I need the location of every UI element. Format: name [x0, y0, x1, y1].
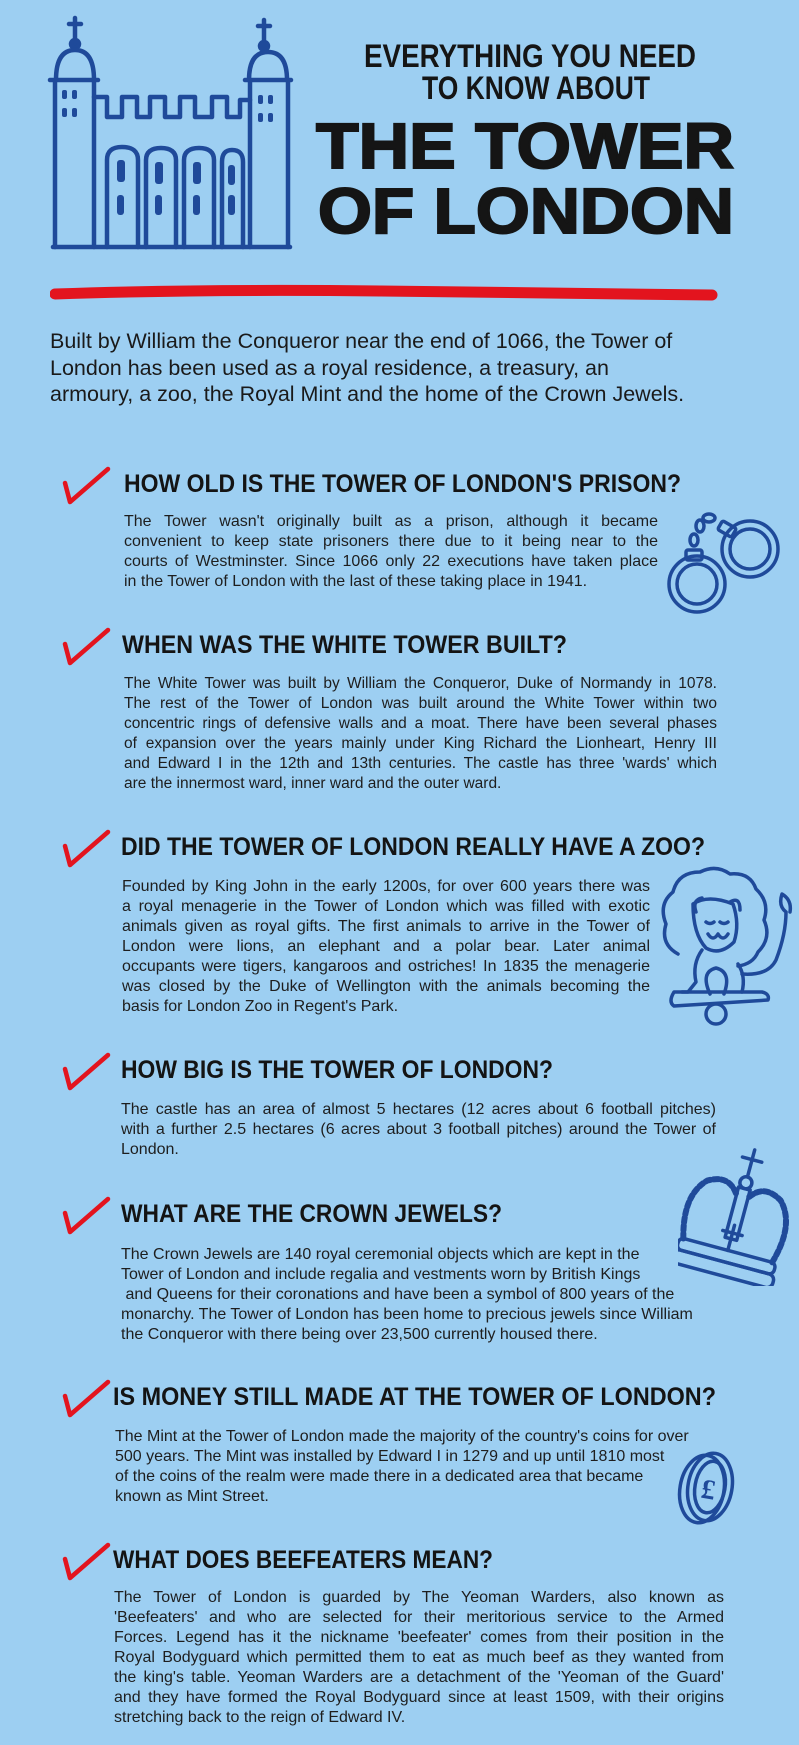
text: crown jewels: the Conqueror with there being over 23,500 currently housed there. [121, 1326, 598, 1343]
text: zoo: Founded by King John in the early 1200s, for over 600 years there was [122, 878, 650, 895]
intro text: Built by William the Conqueror near the end of 1066, the Tower of [50, 329, 672, 353]
title: OF LONDON [318, 175, 734, 245]
text: white tower: are the innermost ward, inner ward and the outer ward. [124, 775, 501, 792]
icon: tower of london drawing [48, 16, 294, 250]
text: crown jewels: and Queens for their coronations and have been a symbol of 800 years of the [125, 1286, 674, 1303]
text: white tower: The White Tower was built by William the Conqueror, Duke of Normandy in 1078. [124, 675, 717, 692]
text: mint: The Mint at the Tower of London made the majority of the country's coins for over [115, 1428, 689, 1445]
icon: crown [678, 1148, 789, 1286]
text: white tower: and Edward I in the 12th and 13th centuries. The castle has three 'wards' which [124, 755, 717, 772]
text: zoo: was closed by the Duke of Wellington with the animals becoming the [122, 978, 650, 995]
text: prison: The Tower wasn't originally built as a prison, although it became [124, 513, 658, 530]
text: size: The castle has an area of almost 5 hectares (12 acres about 6 football pitches) [121, 1101, 716, 1118]
text: mint: known as Mint Street. [115, 1488, 269, 1505]
text: beefeaters [114, 1589, 724, 1726]
text: zoo [122, 878, 650, 1015]
text: crown jewels: Tower of London and include regalia and vestments worn by British Kings [121, 1266, 640, 1283]
checkmarks and headings: DID THE TOWER OF LONDON REALLY HAVE A ZOO? [121, 833, 705, 861]
intro text: armoury, a zoo, the Royal Mint and the home of the Crown Jewels. [50, 382, 684, 406]
icon: pound coin [678, 1452, 734, 1524]
text: crown jewels: monarchy. The Tower of London has been home to precious jewels since William [121, 1306, 693, 1323]
checkmarks and headings: HOW BIG IS THE TOWER OF LONDON? [121, 1056, 553, 1084]
text: size: with a further 2.5 hectares (6 acres about 3 football pitches) around the Tower of [121, 1121, 716, 1138]
title: EVERYTHING YOU NEED [364, 38, 696, 74]
text: beefeaters: and they have formed the Royal Bodyguard since at least 1509, with their origins [114, 1689, 724, 1706]
icon: pound coin: £ [699, 1474, 718, 1507]
checkmarks and headings: HOW OLD IS THE TOWER OF LONDON'S PRISON? [124, 470, 681, 498]
text: zoo: basis for London Zoo in Regent's Park. [122, 998, 398, 1015]
text: beefeaters: Forces. Legend has it the nickname 'beefeater' comes from their position in the [114, 1629, 724, 1646]
title: THE TOWER [316, 110, 734, 182]
text: mint: 500 years. The Mint was installed by Edward I in 1279 and up until 1810 most [115, 1448, 664, 1465]
text: size: London. [121, 1141, 179, 1158]
intro text [50, 329, 684, 406]
red underline stroke [50, 284, 718, 300]
text: zoo: a royal menagerie in the Tower of London which was filled with exotic [122, 898, 650, 915]
icon: lion [661, 866, 792, 1026]
text: size [121, 1101, 716, 1158]
icon: handcuffs [667, 512, 780, 614]
text: white tower: concentric rings of defensive walls and a moat. There have been several phases [124, 715, 717, 732]
text: zoo: London were lions, an elephant and a polar bear. Later animal [122, 938, 650, 955]
text: beefeaters: The Tower of London is guarded by The Yeoman Warders, also known as [114, 1589, 724, 1606]
text: prison: in the Tower of London with the last of these taking place in 1941. [124, 573, 587, 590]
text: beefeaters: the king's table. Yeoman Warders are a detachment of the 'Yeoman of the Guard' [114, 1669, 724, 1686]
checkmarks and headings: WHAT DOES BEEFEATERS MEAN? [113, 1546, 493, 1574]
text: white tower [124, 675, 717, 792]
checkmarks and headings: IS MONEY STILL MADE AT THE TOWER OF LONDON? [113, 1383, 716, 1411]
text: beefeaters: Royal Bodyguard which permitted them to eat as much beef as they wanted from [114, 1649, 724, 1666]
text: mint: of the coins of the realm were made there in a dedicated area that became [115, 1468, 643, 1485]
text: beefeaters: stretching back to the reign of Edward IV. [114, 1709, 405, 1726]
intro text: London has been used as a royal residence, a treasury, an [50, 356, 609, 380]
title: TO KNOW ABOUT [422, 70, 650, 106]
checkmarks and headings: WHAT ARE THE CROWN JEWELS? [121, 1200, 502, 1228]
text: white tower: of expansion over the years mainly under King Richard the Lionheart, Henry III [124, 735, 717, 752]
text: crown jewels: The Crown Jewels are 140 royal ceremonial objects which are kept in the [121, 1246, 639, 1263]
text: crown jewels [121, 1246, 693, 1343]
text: prison [124, 513, 658, 590]
text: prison: convenient to keep state prisoners there due to it being near to the [124, 533, 658, 550]
checkmarks and headings: WHEN WAS THE WHITE TOWER BUILT? [122, 631, 567, 659]
text: zoo: occupants were tigers, kangaroos and ostriches! In 1835 the menagerie [122, 958, 650, 975]
text: white tower: The rest of the Tower of London was built around the White Tower within two [124, 695, 717, 712]
text: zoo: animals given as royal gifts. The first animals to arrive in the Tower of [122, 918, 650, 935]
text: prison: courts of Westminster. Since 1066 only 22 executions have taken place [124, 553, 658, 570]
text: beefeaters: 'Beefeaters' and who are selected for their meritorious service to the Armed [114, 1609, 724, 1626]
text: mint [115, 1428, 689, 1505]
title [316, 38, 734, 245]
